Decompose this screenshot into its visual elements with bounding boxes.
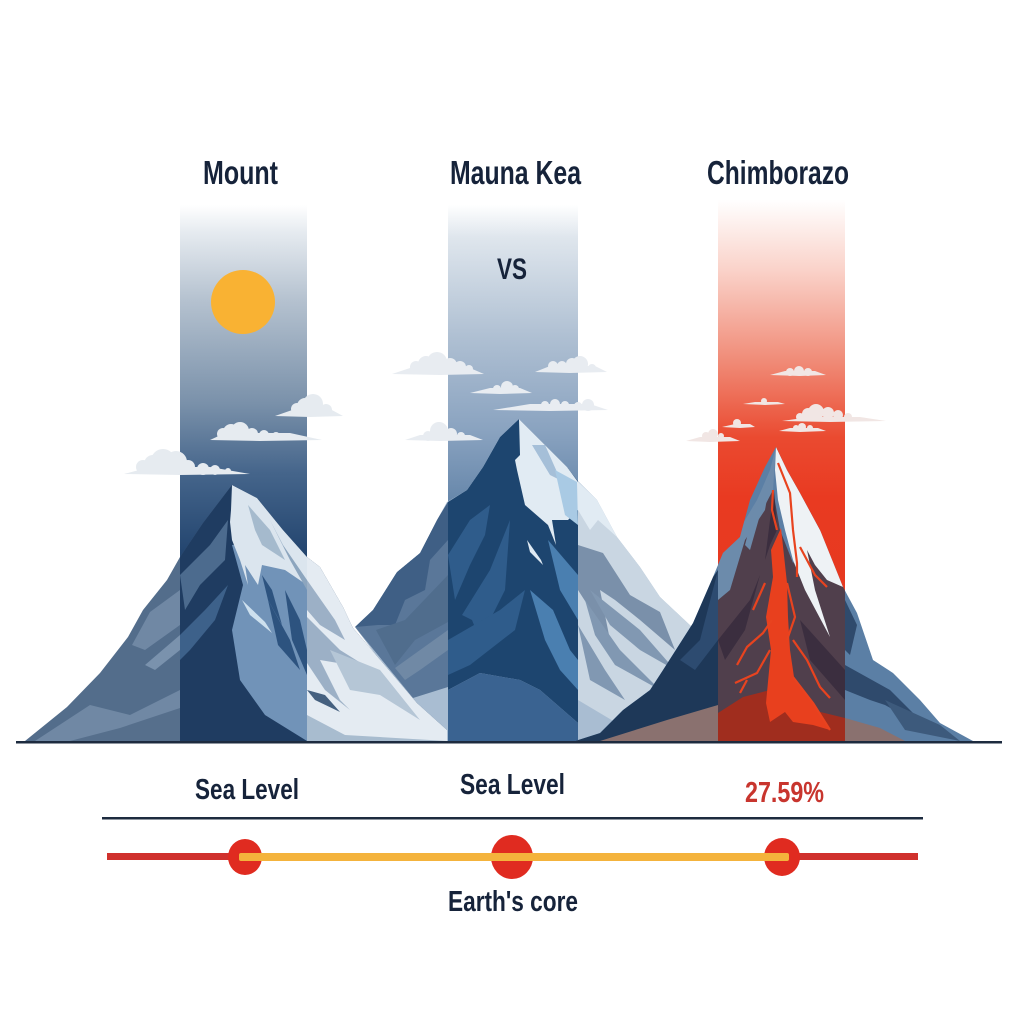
cloud group: Mauna Kea <box>392 352 608 441</box>
panel: Chimborazo band <box>718 200 845 741</box>
title: Mauna Kea: Mauna Kea <box>450 154 581 191</box>
label: Earth's core: Earth's core <box>448 886 578 918</box>
cloud group: Chimborazo <box>686 366 886 442</box>
label: percentage: 27.59% <box>745 777 824 809</box>
cloud group: Mount <box>124 394 343 475</box>
divider line <box>102 817 923 820</box>
axis: ground line <box>16 741 1002 744</box>
label: VS: VS <box>497 253 527 286</box>
mountain: Chimborazo <box>570 440 980 745</box>
label: Sea Level left: Sea Level <box>195 774 299 806</box>
title: Chimborazo: Chimborazo <box>707 154 849 191</box>
panel: Mount band <box>180 205 307 741</box>
mountain: Mauna Kea <box>355 419 691 741</box>
timeline <box>107 835 918 879</box>
label: Sea Level centre: Sea Level <box>460 769 565 801</box>
icon: sun <box>211 270 275 334</box>
mountain: Mount <box>20 480 460 745</box>
title: Mount: Mount <box>203 154 278 191</box>
panel: Mauna Kea band <box>448 205 578 741</box>
